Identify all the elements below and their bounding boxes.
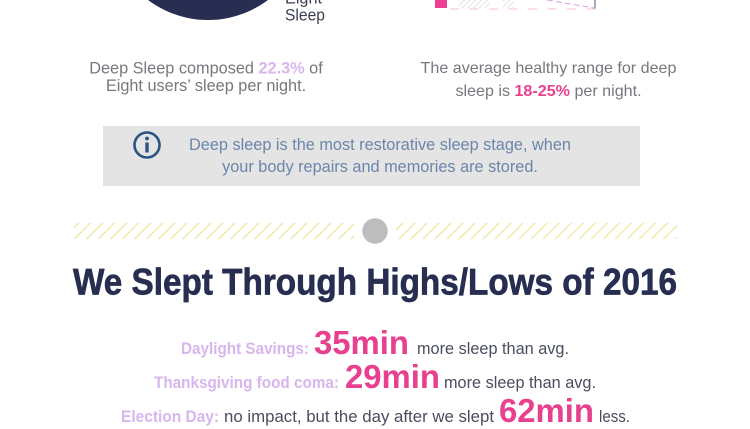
event: daylight savings: more sleep than avg. <box>417 340 569 358</box>
text: healthy range: The average healthy range for deep <box>421 59 676 77</box>
callout text: Deep sleep is the most restorative sleep stage, when <box>189 136 571 154</box>
event: election day: less. <box>599 408 630 426</box>
event: thanksgiving: more sleep than avg. <box>444 374 596 392</box>
icon: info <box>134 132 160 158</box>
event: daylight savings: 35min <box>314 324 409 361</box>
text: deep sleep share <box>89 60 323 95</box>
event: election day: Election Day: <box>121 408 219 426</box>
event: thanksgiving: 29min <box>345 358 440 395</box>
title: We Slept Through Highs/Lows of 2016 <box>73 260 677 302</box>
text: deep sleep share: Deep Sleep composed 22.3% of <box>89 60 323 78</box>
text: healthy range: sleep is 18-25% per night. <box>455 82 642 100</box>
text: healthy range <box>421 59 676 100</box>
event: thanksgiving: Thanksgiving food coma: <box>154 374 339 392</box>
event: daylight savings: Daylight Savings: <box>181 340 309 358</box>
callout text: your body repairs and memories are stored. <box>222 158 538 176</box>
pie legend label: Sleep <box>285 6 325 24</box>
callout: deep sleep fact <box>103 126 640 186</box>
callout text <box>189 136 571 176</box>
event: election day <box>121 392 630 429</box>
text: deep sleep share: Eight users’ sleep per night. <box>106 77 306 95</box>
event: daylight savings <box>181 324 569 361</box>
event: election day: 62min <box>499 392 594 429</box>
event: thanksgiving <box>154 358 596 395</box>
bar chart: healthy range fragment <box>435 0 596 9</box>
section divider <box>74 218 677 244</box>
pie chart: deep sleep share <box>108 0 308 20</box>
event: election day: no impact, but the day after we slept <box>224 408 494 426</box>
